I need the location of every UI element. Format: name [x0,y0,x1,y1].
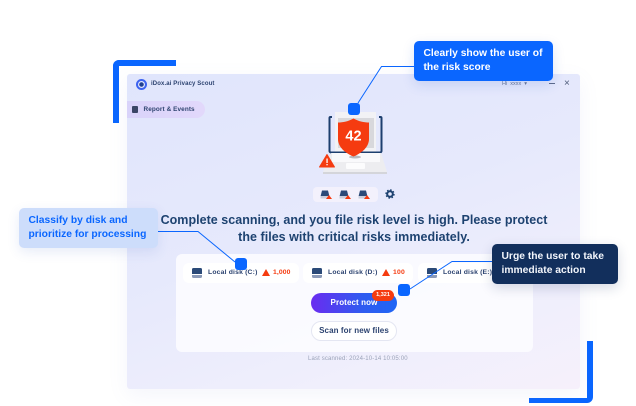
window close control: × [564,78,570,89]
callout: classify by disk [19,208,158,248]
badge: risk total: 1,321 [376,292,390,298]
tab label: Report & Events [144,106,195,112]
app title: iDox.ai Privacy Scout [151,80,215,86]
settings gear icon [385,189,395,199]
disk icon [312,268,322,278]
button: protect now: Protect now [331,298,377,307]
disk card: E [418,263,508,283]
bracket: bottom right [529,341,593,403]
heading [161,213,548,244]
callout: classify by disk: prioritize for processing [28,229,146,240]
bracket: top left [113,60,176,123]
panel: app window [127,74,580,389]
disk status icons [320,190,370,199]
callout: urge action: Urge the user to take [502,251,604,262]
disk card: C [183,263,299,283]
disk label: Local disk (D:) [328,269,378,276]
callout: classify by disk: Classify by disk and [28,215,128,226]
button: scan for new files: Scan for new files [319,326,389,335]
callout: risk score: Clearly show the user of [424,48,543,59]
button: protect now [311,293,397,313]
callout: urge action: immediate action [502,265,586,276]
heading: Complete scanning, and you file risk level is high. Please protect [161,213,547,227]
user menu: Hi xxxx ▾ [502,80,527,86]
button: scan for new files [311,321,397,341]
disk status icon row [313,187,378,202]
warning triangle [320,154,334,167]
marker: risk score [348,103,360,115]
marker: protect button [398,284,410,296]
badge: risk total [372,290,394,301]
callout: risk score: the risk score [424,62,490,73]
window minimize control [549,83,555,84]
app logo icon [136,79,147,90]
tab icon [132,106,138,113]
heading: the files with critical risks immediately. [238,230,470,244]
shield [338,118,369,156]
disk label: Local disk (E:) [443,269,492,276]
disk icon [192,268,202,278]
risk count: 1,000 [273,269,291,276]
warning icon [382,268,390,276]
sidebar tab: report and events [127,101,205,118]
last scanned timestamp: Last scanned: 2024-10-14 10:05:00 [308,356,408,362]
disk icon [427,268,437,278]
marker: disk list [235,258,247,270]
warning icon [262,268,270,276]
panel: disk results [176,254,533,352]
disk label: Local disk (C:) [208,269,258,276]
illustration: laptop with risk score [319,112,387,174]
disk card: D [303,263,413,283]
callout: urge action [492,244,618,284]
risk score: 42 [345,128,362,144]
risk count: 100 [393,269,405,276]
callout: risk score [414,41,553,81]
